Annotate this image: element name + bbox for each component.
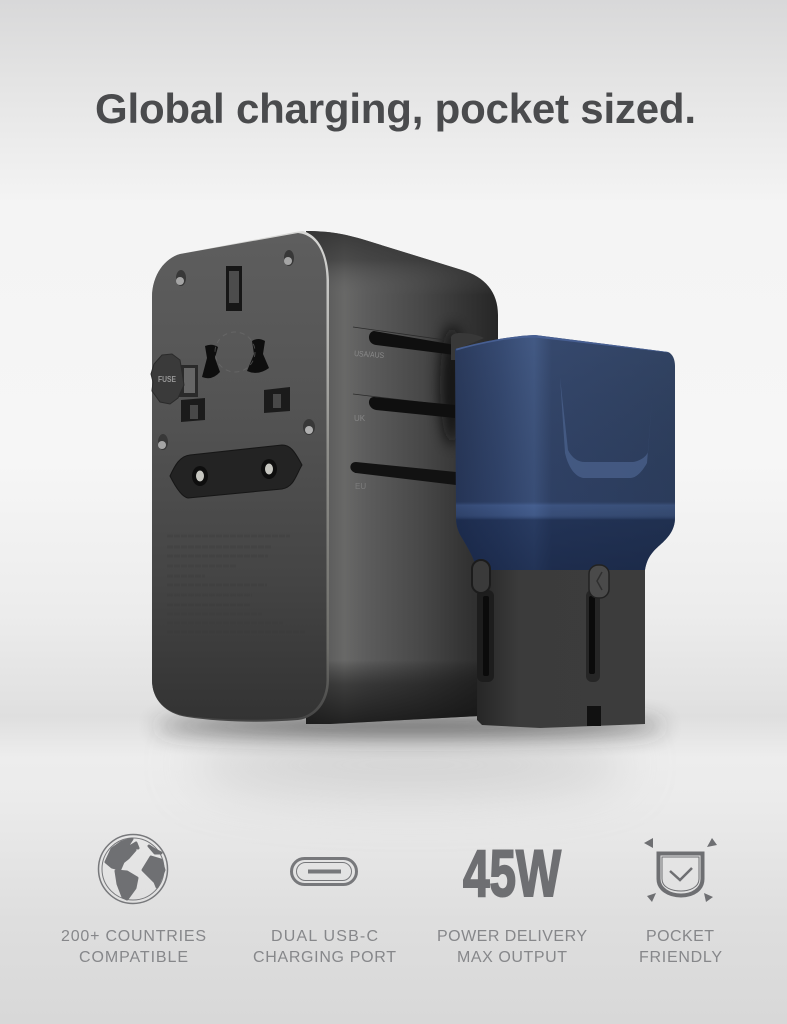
slider right [586, 565, 609, 682]
icon: pocket with arrows [644, 838, 717, 902]
plug slot: USA/AUS: USA/AUS [354, 349, 384, 360]
feature: dual USB-C: CHARGING PORT [253, 949, 396, 966]
plug slot: USA/AUS [353, 327, 455, 360]
feature: pocket friendly: FRIENDLY [639, 949, 722, 966]
slider left [472, 560, 494, 682]
label: POCKET [646, 928, 714, 945]
plug slot: UK: UK [354, 414, 366, 423]
icon: 45W: 45W [463, 836, 562, 910]
ground shadow [155, 717, 665, 795]
title: Global charging, pocket sized. [95, 85, 696, 132]
plug slot: EU [350, 462, 456, 491]
fuse cap: FUSE [158, 375, 177, 384]
label: POWER DELIVERY [437, 928, 587, 945]
feature: 200+ countries: COMPATIBLE [79, 949, 188, 966]
universal socket holes [181, 339, 290, 422]
USB-A port [226, 266, 242, 311]
travel adapter [151, 225, 500, 725]
plug slot: UK [353, 394, 455, 423]
feature: 45W: MAX OUTPUT [457, 949, 567, 966]
icon: globe [98, 834, 168, 904]
adapter side body [300, 225, 500, 725]
feature: dual USB-C [253, 858, 396, 966]
icon: USB-C port [292, 858, 356, 884]
adapter front face [151, 231, 329, 722]
wall charger [450, 330, 680, 728]
blue translucent cap [450, 330, 680, 575]
USB port notch [587, 706, 601, 726]
moulded grip recess [560, 377, 653, 478]
plug slot: EU: EU [355, 482, 366, 491]
fuse cap [151, 354, 198, 404]
feature: 45W [437, 836, 587, 966]
feature: 200+ countries [61, 834, 206, 966]
lower black housing [477, 566, 645, 728]
EU socket plate [170, 445, 302, 498]
label: 200+ COUNTRIES [61, 928, 206, 945]
screw holes [158, 250, 315, 450]
label: DUAL USB-C [271, 928, 378, 945]
faint centre mark [215, 332, 255, 372]
feature: pocket friendly [639, 838, 722, 966]
charger tab behind [451, 333, 484, 360]
engraved specification block [167, 536, 305, 632]
